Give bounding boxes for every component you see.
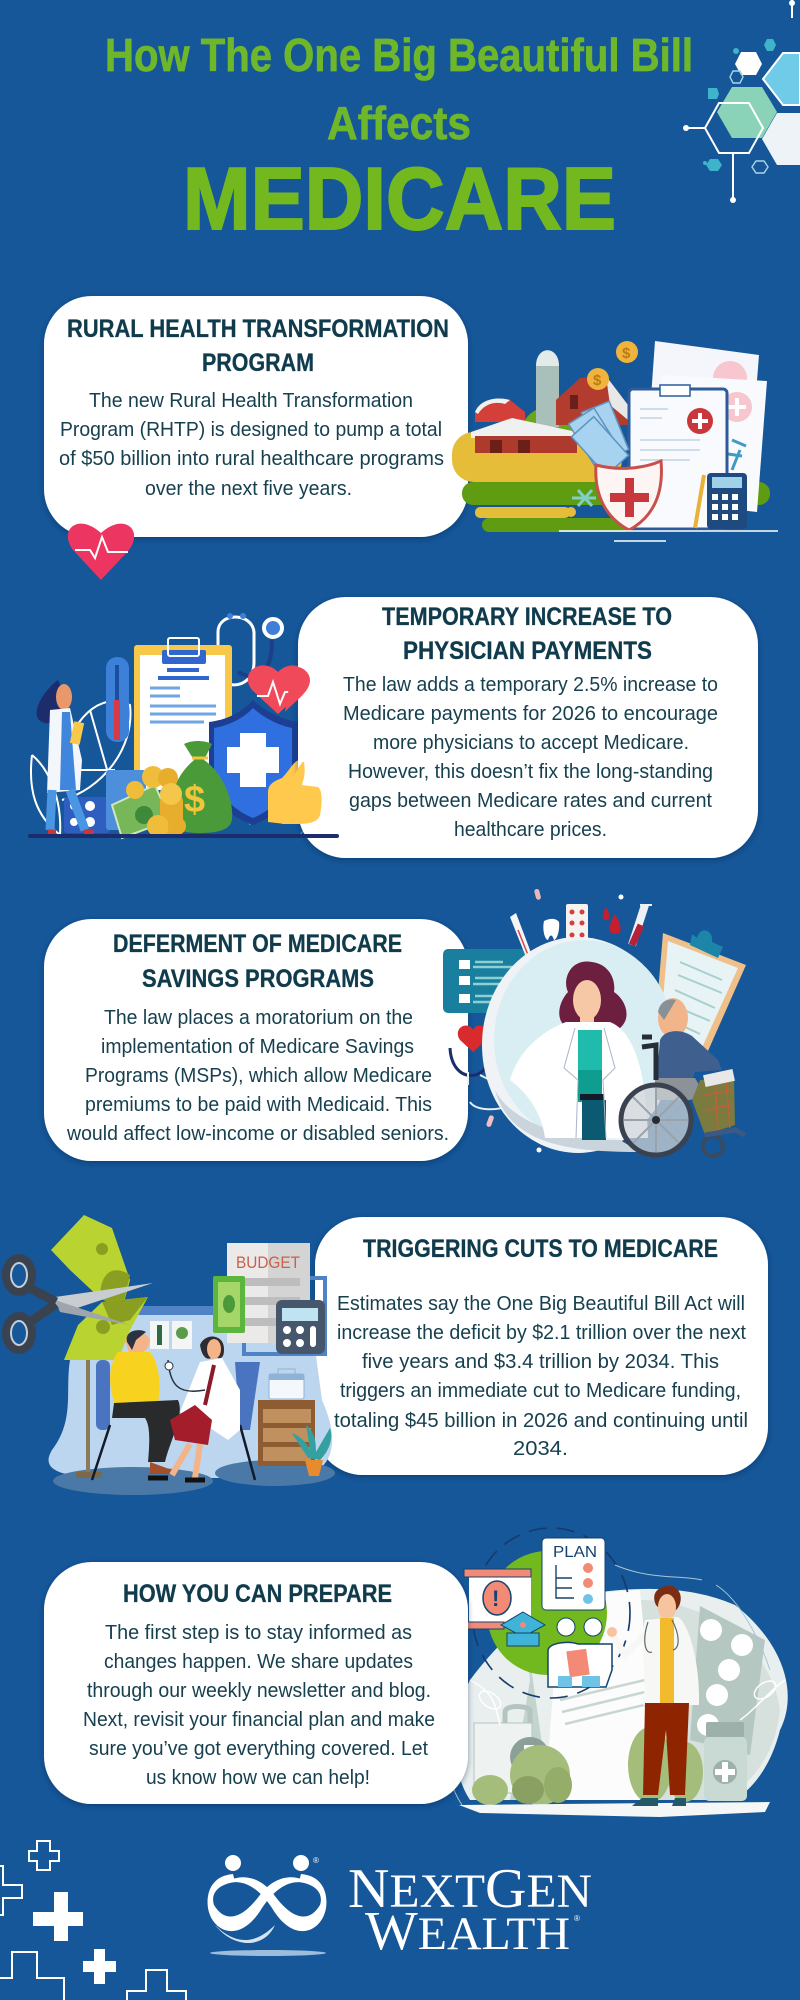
pills (64, 797, 110, 833)
thumbs up (268, 760, 322, 824)
window (105, 1278, 325, 1354)
text: rural health body: Program (RHTP) is designed to pump a total (60, 418, 442, 441)
shield (596, 461, 661, 530)
title (105, 29, 693, 248)
text: physician payments body: However, this doesn’t fix the long-standing (348, 760, 713, 783)
stethoscope and heart (450, 1025, 510, 1109)
panel: temporary increase to physician payments (298, 597, 758, 858)
text: rural health body (59, 389, 444, 500)
clipboard (629, 385, 727, 529)
leaves (31, 701, 336, 835)
illustration: physician payments (31, 613, 336, 838)
coins and cash (112, 766, 186, 838)
text: deferment body: implementation of Medicare Savings (101, 1035, 414, 1058)
heading: triggering cuts: TRIGGERING CUTS TO MEDICARE (363, 1235, 718, 1263)
posters (150, 1321, 192, 1349)
team icons (548, 1618, 612, 1687)
text: deferment body: would affect low-income or disabled seniors. (66, 1122, 449, 1145)
budget document (227, 1243, 310, 1343)
plan card (542, 1538, 605, 1610)
clipboard (654, 930, 746, 1060)
doctor (607, 1586, 699, 1806)
medical icons (486, 888, 652, 1152)
logo wordmark: WEALTH (365, 1900, 570, 1961)
heading: physician payments (382, 603, 672, 665)
text: rural health body: over the next five years. (145, 477, 352, 500)
cash note (213, 1276, 245, 1333)
title: How The One Big Beautiful Bill (105, 29, 693, 81)
heading: rural health: RURAL HEALTH TRANSFORMATION (67, 315, 449, 343)
logo mark: ® (313, 1856, 319, 1865)
text: triggering cuts body: five years and $3.4 trillion by 2034. This (362, 1350, 719, 1373)
logo wordmark: NEXTGEN (348, 1858, 592, 1920)
title: MEDICARE (183, 149, 616, 248)
silo (536, 350, 559, 427)
ground (459, 1802, 770, 1817)
medicine bottle (704, 1722, 747, 1801)
illustration: prepare plan (432, 1528, 788, 1817)
illustration: rural farm and healthcare (452, 341, 778, 541)
heading: rural health: PROGRAM (202, 349, 314, 377)
backdrop blob (49, 1312, 335, 1495)
panel: how you can prepare (44, 1562, 468, 1804)
text: physician payments body: Medicare payments for 2026 to encourage (343, 702, 718, 725)
text: prepare body: Next, revisit your financial plan and make (83, 1708, 435, 1731)
text: prepare body: us know how we can help! (146, 1766, 370, 1789)
patient (110, 1330, 180, 1474)
coins (587, 341, 638, 390)
text: physician payments body: gaps between Medicare rates and current (349, 789, 712, 812)
money bag (168, 741, 232, 833)
heading: physician payments: PHYSICIAN PAYMENTS (403, 637, 652, 665)
coins: $ (593, 372, 602, 389)
doctor figure (37, 680, 94, 832)
decorative leaves (432, 1565, 785, 1805)
calculator and pen (695, 473, 747, 529)
stethoscope (218, 613, 282, 685)
plan card: PLAN (553, 1544, 597, 1561)
graduation cap (501, 1612, 545, 1646)
icon: heart with pulse (68, 524, 134, 580)
text: physician payments body: The law adds a temporary 2.5% increase to (343, 673, 718, 696)
cash (569, 401, 629, 475)
doctor (148, 1336, 240, 1480)
icon: decorative crosses (0, 1841, 186, 2000)
text: deferment body: Programs (MSPs), which allow Medicare (85, 1064, 432, 1087)
illustration: doctor and senior in wheelchair (443, 888, 746, 1156)
text: prepare body: The first step is to stay informed as (105, 1621, 412, 1644)
thermometer (106, 657, 129, 742)
text: prepare body: changes happen. We share updates (104, 1650, 413, 1673)
illustration: budget cuts at the doctor (6, 1215, 335, 1495)
text: prepare body: through our weekly newsletter and blog. (87, 1679, 431, 1702)
clipboard (134, 638, 232, 790)
chairs and IV pole (76, 1360, 260, 1480)
budget document: BUDGET (236, 1253, 300, 1272)
text: deferment body: The law places a moratorium on the (104, 1006, 413, 1029)
circle backdrop (482, 937, 674, 1153)
shield with cross (209, 700, 298, 825)
illustration overlap: heart, thumb and base line (28, 667, 339, 838)
logo mark (208, 1855, 326, 1956)
text: rural health body: of $50 billion into rural healthcare programs (59, 447, 444, 470)
plant (292, 1425, 331, 1476)
backdrop blob (455, 1589, 788, 1800)
heart with pulse (248, 665, 309, 714)
calculator (276, 1300, 325, 1354)
doctor (510, 962, 648, 1140)
heading: prepare: HOW YOU CAN PREPARE (123, 1580, 392, 1608)
barns (471, 376, 628, 453)
text: triggering cuts body: 2034. (513, 1437, 568, 1460)
logo wordmark (348, 1858, 592, 1961)
medical kit (474, 1706, 550, 1793)
coins: $ (622, 345, 631, 362)
torn banknote (51, 1215, 148, 1360)
documents (648, 341, 767, 512)
heading: rural health (67, 315, 449, 377)
cabinet and box (258, 1369, 315, 1466)
text: deferment body: premiums to be paid with Medicaid. This (85, 1093, 432, 1116)
text: triggering cuts body: increase the deficit by $2.1 trillion over the next (337, 1321, 746, 1344)
text: prepare body: sure you’ve got everything covered. Let (89, 1737, 428, 1760)
heading: physician payments: TEMPORARY INCREASE TO (382, 603, 672, 631)
text: deferment body (66, 1006, 449, 1145)
text: physician payments body (343, 673, 718, 841)
pill blister (690, 1606, 765, 1755)
ground stripes (452, 406, 770, 532)
panel: deferment of medicare savings programs (44, 919, 468, 1161)
money bag: $ (184, 779, 205, 821)
scissors (6, 1258, 153, 1350)
logo: nextgen wealth (208, 1855, 592, 1961)
checklist board (443, 949, 528, 1013)
panel: rural health transformation program (44, 296, 468, 537)
text: physician payments body: healthcare prices. (454, 818, 607, 841)
bushes (472, 1727, 703, 1805)
text: triggering cuts body: triggers an immediate cut to Medicare funding, (340, 1379, 741, 1402)
panel: triggering cuts to medicare (315, 1217, 768, 1475)
green circle and dashed ring (472, 1528, 630, 1698)
text: physician payments body: more physicians to accept Medicare. (373, 731, 689, 754)
alert board (464, 1569, 531, 1629)
heading: deferment: DEFERMENT OF MEDICARE (113, 930, 402, 958)
text: triggering cuts body: totaling $45 billion in 2026 and continuing until (334, 1409, 748, 1432)
heading: deferment (113, 930, 402, 993)
text: prepare body (83, 1621, 435, 1789)
alert board: ! (492, 1586, 499, 1611)
text: triggering cuts body: Estimates say the One Big Beautiful Bill Act will (337, 1292, 745, 1315)
text: rural health body: The new Rural Health Transformation (89, 389, 413, 412)
senior in wheelchair (621, 998, 745, 1156)
icon: hexagon network (683, 0, 800, 203)
heading: deferment: SAVINGS PROGRAMS (142, 965, 374, 993)
title: Affects (327, 97, 471, 149)
text: triggering cuts body (334, 1292, 748, 1460)
logo wordmark: ® (574, 1914, 580, 1923)
